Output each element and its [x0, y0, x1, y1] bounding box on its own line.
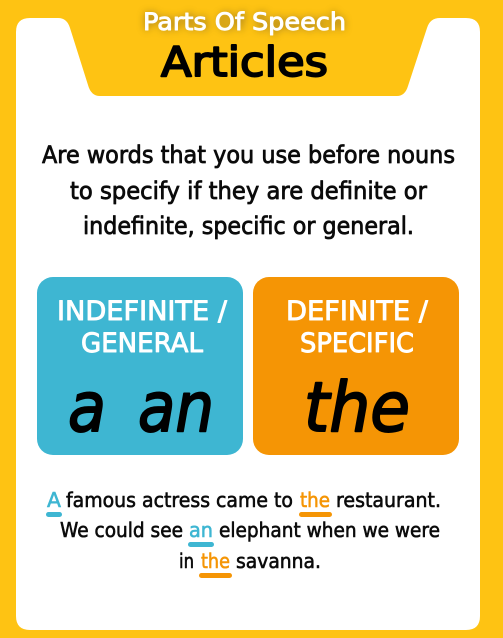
example line 1 [46, 488, 441, 517]
definition text: indefinite, specific or general. [83, 212, 414, 240]
example line 3: the [201, 549, 230, 573]
definition text: to specify if they are definite or [70, 177, 427, 205]
title: Articles [161, 38, 328, 86]
example line 3 [179, 549, 321, 578]
subtitle: Parts Of Speech [143, 8, 346, 36]
example line 2: an [189, 518, 213, 542]
definition text: Are words that you use before nouns [42, 141, 455, 169]
example line 2: elephant when we were [219, 518, 440, 542]
example sentences [46, 488, 441, 578]
example line 1: A [47, 488, 61, 512]
panel heading: definite: DEFINITE / [286, 296, 429, 327]
panel heading: definite [286, 296, 429, 359]
example line 3: savanna. [236, 549, 321, 573]
example line 3: in [179, 549, 194, 573]
example line 2 [60, 518, 440, 547]
panel heading: indefinite: INDEFINITE / [57, 296, 228, 327]
example line 1: restaurant. [336, 488, 441, 512]
panel: definite [253, 277, 459, 455]
panel: indefinite [37, 277, 243, 455]
articles: a an [68, 368, 214, 448]
panel heading: definite: SPECIFIC [300, 328, 414, 359]
subtitle: Parts Of Speech [143, 8, 346, 36]
example line 1: famous actress came to [66, 488, 293, 512]
example line 1: the [300, 488, 330, 512]
panel heading: indefinite [57, 296, 228, 359]
articles: a an: an [138, 368, 214, 448]
panel heading: indefinite: GENERAL [81, 328, 203, 359]
articles: a an: a [68, 368, 106, 448]
article: the: the [304, 368, 410, 448]
definition text [42, 141, 455, 240]
example line 2: We could see [60, 518, 183, 542]
